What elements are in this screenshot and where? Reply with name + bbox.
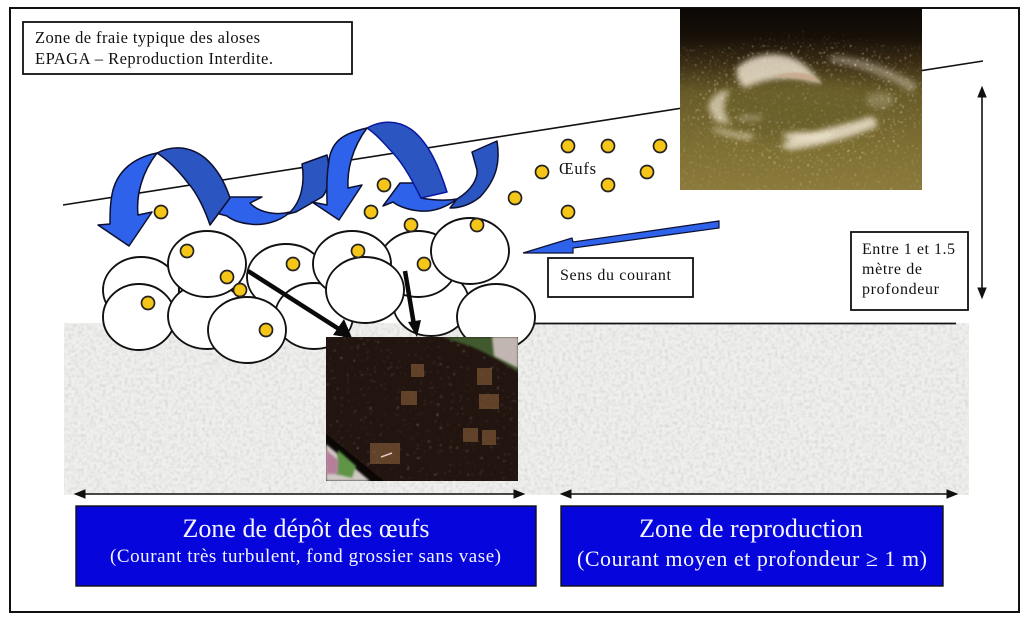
title box (23, 22, 352, 74)
black arrow to egg deposit photo (right) (405, 271, 421, 337)
panel: reproduction zone (561, 506, 943, 586)
eggs label: Œufs (559, 159, 596, 178)
title box: Zone de fraie typique des aloses (35, 28, 260, 47)
pebbles (103, 218, 535, 363)
depth label: profondeur (862, 281, 940, 298)
swirl arrow 2 (216, 155, 329, 224)
gravel bank corners in photo (326, 434, 384, 481)
swirl arrow 4 (383, 141, 498, 211)
panel: egg deposit zone: Zone de dépôt des œufs (183, 514, 429, 543)
depth label: mètre de (862, 261, 922, 278)
black arrow to egg deposit photo (left) (248, 271, 352, 338)
current direction label: Sens du courant (560, 267, 672, 284)
panel: reproduction zone: Zone de reproduction (639, 514, 863, 543)
photo: eggs on the substrate (326, 337, 518, 481)
panel: egg deposit zone (76, 506, 536, 586)
photo: spawning swirl at the surface (680, 8, 922, 190)
depth double arrow (978, 87, 986, 298)
current direction label (548, 258, 693, 297)
depth label: Entre 1 et 1.5 (862, 241, 955, 258)
swirl arrow 1 (98, 148, 230, 246)
reproduction zone span arrow (561, 490, 957, 498)
gravel riverbed (64, 323, 969, 495)
swirl arrows: turbulent current (98, 122, 498, 246)
current direction arrow (523, 221, 719, 253)
water surface line (63, 61, 983, 205)
river bottom line (530, 322, 956, 324)
panel: egg deposit zone: (Courant très turbulent, fond grossier sans vase) (110, 546, 501, 567)
eggs (142, 140, 666, 336)
depth label (851, 232, 968, 310)
title box: EPAGA – Reproduction Interdite. (35, 49, 273, 68)
panel: reproduction zone: (Courant moyen et profondeur ≥ 1 m) (577, 546, 927, 571)
swirl arrow 3 (312, 122, 447, 220)
egg deposit zone span arrow (75, 490, 524, 498)
